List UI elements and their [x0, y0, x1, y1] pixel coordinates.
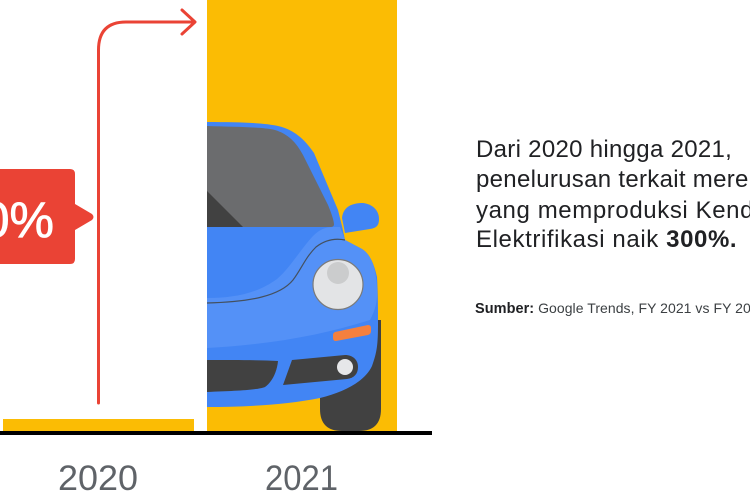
icon: blue car [207, 122, 381, 431]
car turn signal [333, 325, 371, 341]
text block: main statement: Elektrifikasi naik 300%. [476, 226, 737, 253]
text block: main statement [476, 136, 750, 253]
bar: 2020 [3, 419, 194, 432]
label: 2021: 2021 [265, 459, 338, 498]
car right grille [283, 355, 358, 385]
label: 2020: 2020 [58, 459, 138, 498]
car mirror [342, 203, 379, 233]
text block: main statement: Dari 2020 hingga 2021, [476, 136, 732, 163]
arrow: growth [98, 10, 195, 403]
baseline axis [0, 431, 432, 435]
car windshield [207, 126, 334, 227]
callout: 300% [0, 169, 94, 264]
car headlight [313, 260, 363, 310]
car side window [207, 191, 243, 227]
car left grille [207, 360, 278, 392]
car hood seam [207, 239, 345, 303]
car body [207, 122, 378, 407]
car wheel [320, 320, 381, 431]
bar: 2021 [207, 0, 397, 432]
car hood highlight [207, 227, 377, 348]
car fog lamp [337, 359, 353, 375]
